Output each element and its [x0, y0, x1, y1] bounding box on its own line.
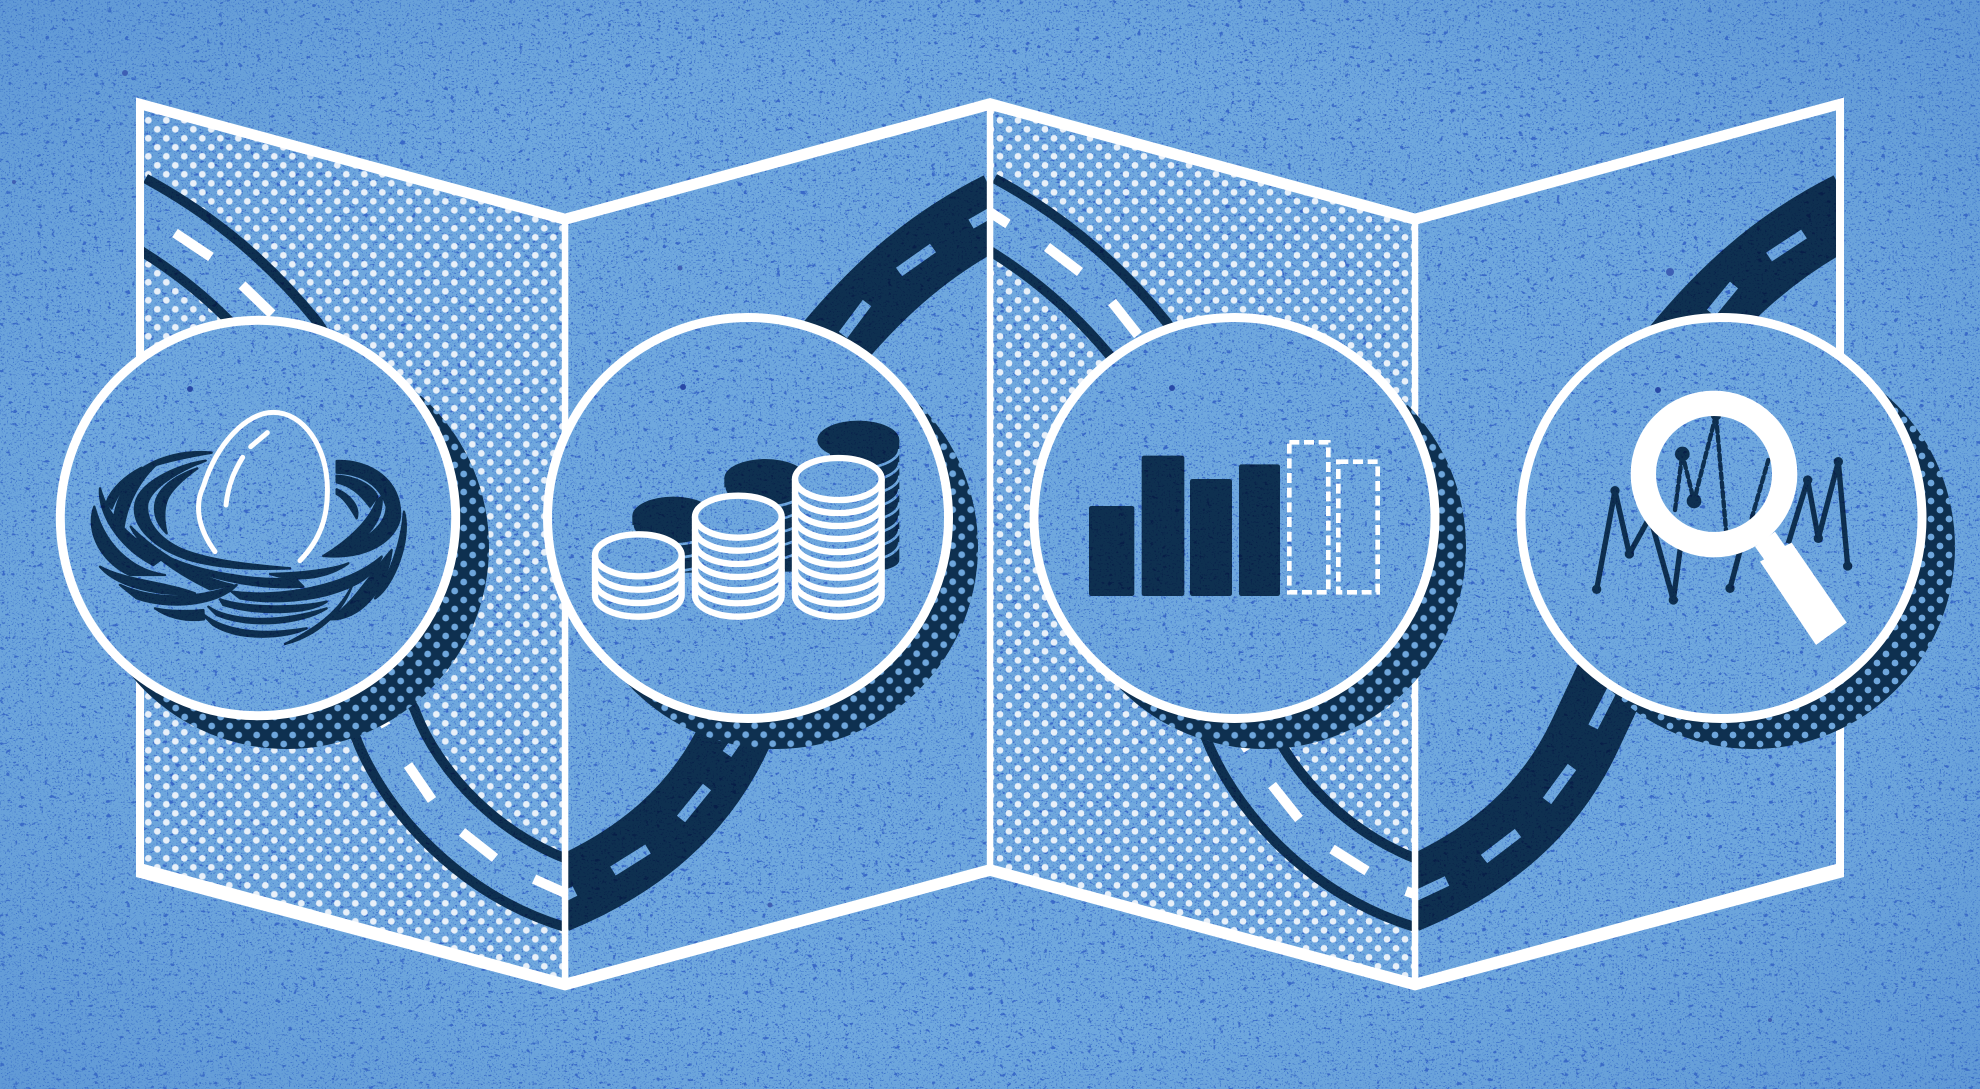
icon: line chart behind magnifier: [1592, 410, 1852, 605]
circle outline 4: [1521, 318, 1922, 718]
road on panel 1: [130, 207, 575, 896]
circle outline 2: [548, 318, 948, 718]
halftone fold panel 3: [990, 100, 1415, 990]
icon: magnifying glass: [1643, 403, 1847, 645]
circle shadow 2: [574, 345, 978, 749]
icon: bird nest: [92, 452, 406, 644]
white road dashes on panel 1: [175, 233, 565, 893]
road on panel 3: [979, 207, 1425, 896]
folded map outline: [136, 98, 1844, 990]
circle shadow 4: [1551, 345, 1955, 749]
icon: coin stack bodies: [595, 458, 882, 617]
circle outline 1: [60, 320, 456, 716]
icon: dark coin stacks: [632, 421, 899, 573]
paper specks: [12, 70, 1772, 1022]
circle shadow 3: [1062, 345, 1466, 749]
circle shadow 1: [85, 345, 489, 749]
icon: bar chart solid bars: [1089, 456, 1280, 596]
road on panel 2: [555, 208, 1000, 897]
paper grain inside circles: [64, 322, 1918, 714]
icon: egg: [199, 412, 327, 561]
icon: white coin stacks: [595, 458, 882, 617]
circle outline 3: [1034, 318, 1435, 718]
icon: dashed forecast bars: [1289, 442, 1378, 592]
white road dashes on panel 3: [988, 211, 1417, 895]
circle discs: [60, 318, 1922, 718]
road on panel 4: [1405, 208, 1850, 897]
halftone fold panel 1: [140, 100, 565, 990]
